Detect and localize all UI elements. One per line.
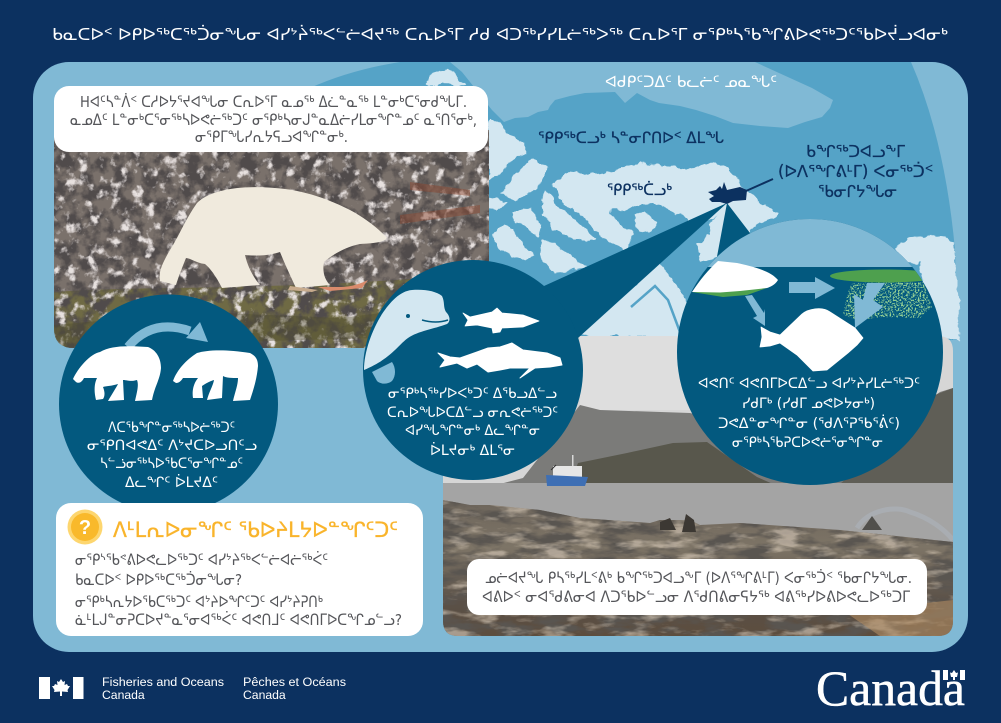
bear circle text: ᓴᓪᓘᓂᖅᓴᐅᖃᑕᕐᓂᖏᓐᓄᑦ [100,456,243,472]
questions body: ᓈᒻᒪᒍᓐᓂᕈᑕᐅᔪᓐᓇᕐᓂᐊᖅᐹᑦ ᐊᕙᑎᒧᑦ ᐊᕙᑎᒥᐅᑕᖏᓄᓪᓗ? [75,610,402,629]
map sea [310,62,957,340]
wedge to ice circle [716,203,810,300]
icon: question mark [68,510,102,544]
text box: polar bear: Hᐊᑦᓴᓐᐲᑉ ᑕᓱᐅᔭᕐᔪᐊᖓᓂ ᑕᕆᐅᕐᒥ ᓇᓄᖅ ᐃᓛᓐᓇᖅ ᒪᓐᓂᒃᑕᕐᓂᑯᖓᒥ. [80,93,467,111]
department name French: Pêches et Océans [243,675,346,689]
questions body [75,550,402,629]
circle: beluga and fish [363,260,583,480]
main panel [33,62,968,652]
arrow: ice to bloom [789,277,835,299]
photo: polar bear [54,130,489,348]
algae under open water [830,270,922,282]
fish circle text: ᐆᒪᔪᓂᒃ ᐃᒪᕐᓂ [430,442,515,459]
map label: Greenland: ᐊᑯᑭᑦᑐᐃᑦ ᑲᓚᓖᑦ ᓄᓇᖓᑦ [605,73,777,91]
text box: whale bone photo [467,559,927,615]
shoreline boulders [660,514,696,532]
bear: healthy [73,346,161,401]
text box: whale bone photo: ᐊᕕᐅᑉ ᓂᐊᖁᕕᓂᐊ ᐱᑐᖃᐅᓪᓗᓂ ᐱᖁᑎᕕᓂᕋᔭᖅ ᐊᕕᖅᓯᐅᕕᐅᕙᓚᐅᖅᑐᒥ [482,588,911,606]
fish circle text: ᐊᓯᖓᖏᓐᓂᒃ ᐃᓚᖏᓐᓂ [405,423,540,439]
map land: Greenland [450,62,833,128]
map marker: study area [708,179,773,204]
fish circle text: ᓂᕿᒃᓴᖅᓯᐅᐸᒃᑐᑦ ᐃᖃᓗᐃᓪᓗ [388,386,557,402]
department name French: Canada [243,688,286,702]
map label: Pangnirtung [778,142,933,202]
fish: cod [438,343,562,378]
ice circle text: ᓂᕿᒃᓴᖃᕈᑕᐅᕙᓖᕐᓂᖏᓐᓂ [732,435,883,451]
circle: polar bears [59,294,278,514]
wedge to fish circle [473,203,727,370]
bear circle text [87,420,257,491]
mountains [500,388,953,486]
circle: sea ice and flounder [677,219,943,485]
text box: polar bear [54,86,488,152]
arrow: ice to flounder [745,295,765,326]
ice circle text: ᐊᕙᑎᑦ ᐊᕙᑎᒥᐅᑕᐃᓪᓗ ᐊᓯᔾᔨᓯᒪᓖᖅᑐᑦ [698,376,920,392]
bear: thin [173,350,258,401]
fish: char [463,308,539,333]
bear circle text: ᓂᕿᑎᐊᕙᐃᑦ ᐱᔾᔪᑕᐅᓗᑎᑦᓗ [87,438,257,454]
map label: Pangnirtung: ᑲᖏᖅᑐᐊᓗᖕᒥ [806,142,905,162]
bear circle text: ᐱᑕᖃᖏᓐᓂᖅᓴᐅᓖᖅᑐᑦ [108,420,235,436]
map label: Pangnirtung: ᖃᓂᒋᔭᖓᓂ [818,182,897,202]
ice circle text: ᑐᕙᐃᓐᓂᖏᓐᓂ (ᖁᐱᕐᕈᖃᕐᕖᑦ) [718,415,900,432]
map label: Pangnirtung: (ᐅᐱᕐᖏᕕᒻᒥ) ᐸᓂᖅᑑᑉ [778,161,933,182]
ship [546,455,588,486]
map channel [631,286,680,332]
questions heading: ᐱᒻᒪᕆᐅᓂᖏᑦ ᖃᐅᔨᒪᔭᐅᓐᖏᑦᑐᑦ [113,518,398,542]
photo: ship and whale bone [443,336,953,636]
sky [708,219,912,267]
Canada wordmark: Canada [816,660,965,716]
department name English: Canada [102,688,145,702]
phytoplankton bloom [843,282,932,320]
flounder [760,309,863,371]
curved arrow [128,322,208,347]
arrow: bloom to seabed [854,283,885,328]
bear circle text: ᐃᓚᖏᑦ ᐆᒪᔪᐃᑦ [125,474,218,491]
ice circle text [698,376,920,451]
beluga [364,290,450,384]
map label: Baffin Bay: ᕿᑭᖅᑕᓗᒃ ᓴᓐᓂᒋᑎᐅᑉ ᐃᒪᖓ [538,129,724,147]
questions body: ᓂᕿᒃᓴᕆᔭᐅᖃᑕᖅᑐᑦ ᐊᔾᔨᐅᖏᑦᑐᑦ ᐊᓯᔾᔨᕈᑎᒃ [75,593,323,611]
map land: Arctic islands [426,69,958,340]
title: ᑲᓇᑕᐅᑉ ᐅᑭᐅᖅᑕᖅᑑᓂᖓᓂ ᐊᓯᔾᔩᖅᐸᓪᓖᐊᔪᖅ ᑕᕆᐅᕐᒥ ᓱᑯ ᐊᑐᖅᓯᓯᒪᓖᖅᐳᖅ ᑕᕆᐅᕐᒥ ᓂᕿᒃᓴᖃᖏᕕᐅᕙᖅᑐᑦᖃᐅᔫᓗᐊᓂᒃ [52,24,948,44]
fish circle text [387,386,558,459]
questions body: ᑲᓇᑕᐅᑉ ᐅᑭᐅᖅᑕᖅᑑᓂᖓᓂ? [75,571,242,589]
polar bear [160,187,387,292]
ice circle text: ᓯᑯᒥᒃ (ᓯᑯᒥ ᓄᕙᐅᔭᓂᒃ) [742,396,875,412]
questions body: ᓂᕿᔅᖃᕝᕕᐅᕙᓚᐅᖅᑐᑦ ᐊᓯᔾᔨᖅᐸᓪᓖᐊᓖᖅᐹᑦ [75,550,328,569]
department name English: Fisheries and Oceans [102,675,224,689]
whale bone [857,509,953,540]
text box: whale bone photo: ᓄᓖᐊᔪᖓ ᑭᓴᖅᓯᒪᑉᕕᒃ ᑲᖏᖅᑐᐊᓗᖕᒥ (ᐅᐱᕐᖏᕕᒻᒥ) ᐸᓂᖅᑑᑉ ᖃᓂᒋᔭᖓᓂ. [485,569,912,587]
map label: Baffin Island: ᕿᑭᖅᑖᓗᒃ [607,181,672,199]
government flag symbol [39,677,84,699]
sky [443,336,953,486]
fish circle text: ᑕᕆᐅᖓᐅᑕᐃᓪᓗ ᓂᕆᕙᓖᖅᑐᑦ [387,405,558,421]
text box: polar bear: ᓇᓄᐃᑦ ᒪᓐᓂᒃᑕᕐᓂᖅᓴᐅᕙᓖᖅᑐᑦ ᓂᕿᒃᓴᓂᒍᓐᓇᐃᓖᓯᒪᓂᖏᓐᓄᑦ ᓇᕐᑎᕐᓂᒃ, [70,111,477,129]
text box: polar bear: ᓂᕿᒥᖓᓯᕆᔭᕋᓗᐊᖏᓐᓂᒃ. [195,128,348,146]
rocks [443,500,953,636]
sea ice [692,261,778,297]
water [443,483,953,543]
icon: question mark: ? [79,517,91,539]
map [310,62,958,340]
callout: research questions [56,503,423,636]
